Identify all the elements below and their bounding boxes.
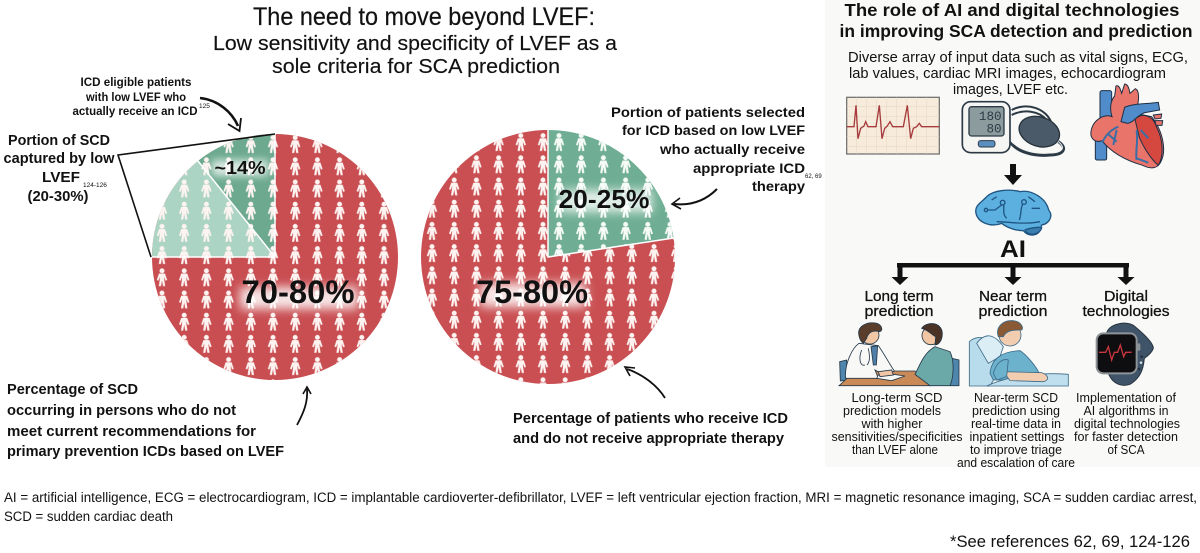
text: near-term description: and escalation of care <box>957 456 1075 470</box>
footnote: references: *See references 62, 69, 124-126 <box>950 532 1190 551</box>
chart: right pie ICD therapy <box>421 130 675 384</box>
heading: Near term prediction: prediction <box>978 303 1048 320</box>
text: percentage of patients: and do not receive appropriate therapy <box>513 431 784 447</box>
text: near-term description <box>957 391 1075 470</box>
text: Portion of patients selected: for ICD based on low LVEF <box>622 122 805 138</box>
label: 75-80%: 75-80% <box>476 274 588 310</box>
text: percentage of SCD <box>7 382 284 460</box>
text: ICD eligible patients: 125 <box>199 103 210 110</box>
text: digital description <box>1074 391 1180 457</box>
label: 20-25%: 20-25% <box>558 184 650 214</box>
text: percentage of SCD: occurring in persons who do not <box>7 403 236 419</box>
text: near-term description: to improve triage <box>970 443 1062 457</box>
text: Portion of SCD captured: captured by low <box>4 151 115 167</box>
title: need to move beyond LVEF: The need to move beyond LVEF: <box>253 3 595 31</box>
heading: Digital technologies <box>1082 288 1170 320</box>
text: long-term description <box>832 391 962 457</box>
text: ICD eligible patients: with low LVEF who <box>85 90 186 104</box>
text: long-term description: prediction models <box>843 404 941 418</box>
text: digital description: of SCA <box>1108 443 1145 457</box>
icon: patient in bed <box>969 321 1068 386</box>
text: long-term description: Long-term SCD <box>852 391 942 405</box>
arrow: to green segment <box>672 189 717 209</box>
text: Portion of patients selected: who actually receive <box>659 141 805 157</box>
footnote: abbreviations: SCD = sudden cardiac death <box>4 509 173 524</box>
title: need to move beyond LVEF: sole criteria for SCA prediction <box>272 56 560 78</box>
icon: smartwatch <box>1097 323 1153 385</box>
text: near-term description: inpatient settings <box>970 430 1064 444</box>
text: Portion of patients selected: 62, 69 <box>805 174 822 180</box>
icon: heart <box>1091 84 1164 168</box>
text: input data: lab values, cardiac MRI images, echocardiogram <box>849 66 1166 82</box>
text: digital description: for faster detection <box>1074 430 1178 444</box>
heading: Long term prediction: prediction <box>864 303 934 320</box>
text: Portion of patients selected: appropriate ICD <box>693 160 805 176</box>
title: need to move beyond LVEF <box>213 3 618 78</box>
text: input data: Diverse array of input data such as vital signs, ECG, <box>848 50 1188 66</box>
text: percentage of SCD: meet current recommendations for <box>7 424 256 440</box>
text: Portion of patients selected: therapy <box>752 178 805 194</box>
text: ICD eligible patients <box>72 75 210 118</box>
text: Portion of SCD captured: LVEF <box>42 170 80 186</box>
footnote: abbreviations <box>4 490 1197 524</box>
heading: Digital technologies: technologies <box>1082 303 1170 320</box>
label: ~14%: ~14% <box>214 158 266 178</box>
text: ICD eligible patients: ICD eligible patients <box>80 75 192 89</box>
icon: doctor and patient <box>839 323 959 386</box>
heading: Near term prediction <box>978 288 1048 320</box>
text: percentage of SCD: Percentage of SCD <box>7 382 138 398</box>
text: Portion of patients selected <box>611 104 822 194</box>
text: input data <box>848 50 1188 98</box>
text: input data: images, LVEF etc. <box>953 82 1068 98</box>
text: digital description: AI algorithms in <box>1084 404 1169 418</box>
arrow: AI branching <box>892 263 1134 285</box>
heading: role of AI: in improving SCA detection and prediction <box>840 21 1192 41</box>
icon: ECG strip <box>847 97 939 154</box>
heading: Near term prediction: Near term <box>979 288 1047 305</box>
text: near-term description: Near-term SCD <box>974 391 1058 405</box>
text: digital description: digital technologies <box>1074 417 1180 431</box>
arrow: down to brain <box>1004 164 1022 185</box>
label: 70-80%: 70-80% <box>242 274 354 310</box>
chart: left pie SCD <box>118 134 398 380</box>
text: digital description: Implementation of <box>1076 391 1177 405</box>
text: near-term description: real-time data in <box>971 417 1061 431</box>
text: long-term description: with higher <box>860 417 922 431</box>
title: need to move beyond LVEF: Low sensitivity and specificity of LVEF as a <box>213 33 618 55</box>
icon: blood pressure monitor <box>962 102 1064 155</box>
arrow: ICD eligible to wedge <box>200 98 241 131</box>
text: ICD eligible patients: actually receive an ICD <box>72 104 198 118</box>
text: Portion of SCD captured: 124-126 <box>83 182 107 189</box>
text: percentage of patients: Percentage of patients who receive ICD <box>513 411 788 427</box>
text: percentage of SCD: primary prevention ICDs based on LVEF <box>7 444 284 460</box>
heading: role of AI: The role of AI and digital technologies <box>844 0 1180 20</box>
heading: role of AI <box>840 0 1192 41</box>
icon: blood pressure monitor: 80 <box>986 121 1002 136</box>
heading: Long term prediction: Long term <box>864 288 934 305</box>
icon: blood pressure monitor: 180 <box>979 109 1002 124</box>
heading: Long term prediction <box>864 288 934 320</box>
text: Portion of SCD captured <box>4 133 115 205</box>
icon: brain <box>976 190 1051 235</box>
footnote: abbreviations: AI = artificial intelligence, ECG = electrocardiogram, ICD = implantable cardioverter-defibrillator, LVEF = left ventricular ejection fraction, MRI = magnetic resonance imaging, SCA = sudden cardiac arrest, <box>4 490 1197 505</box>
label: AI: AI <box>1000 236 1026 263</box>
text: near-term description: prediction using <box>972 404 1060 418</box>
arrow: to right pie red <box>625 367 665 398</box>
arrow: to left pie red <box>297 387 311 425</box>
heading: Digital technologies: Digital <box>1104 288 1148 305</box>
text: Portion of patients selected: Portion of patients selected <box>611 104 805 120</box>
text: Portion of SCD captured: Portion of SCD <box>8 133 110 149</box>
text: percentage of patients <box>513 411 788 447</box>
text: long-term description: than LVEF alone <box>852 443 938 457</box>
text: long-term description: sensitivities/specificities <box>832 430 962 444</box>
panel: AI background <box>825 0 1200 467</box>
text: Portion of SCD captured: (20-30%) <box>28 189 89 205</box>
